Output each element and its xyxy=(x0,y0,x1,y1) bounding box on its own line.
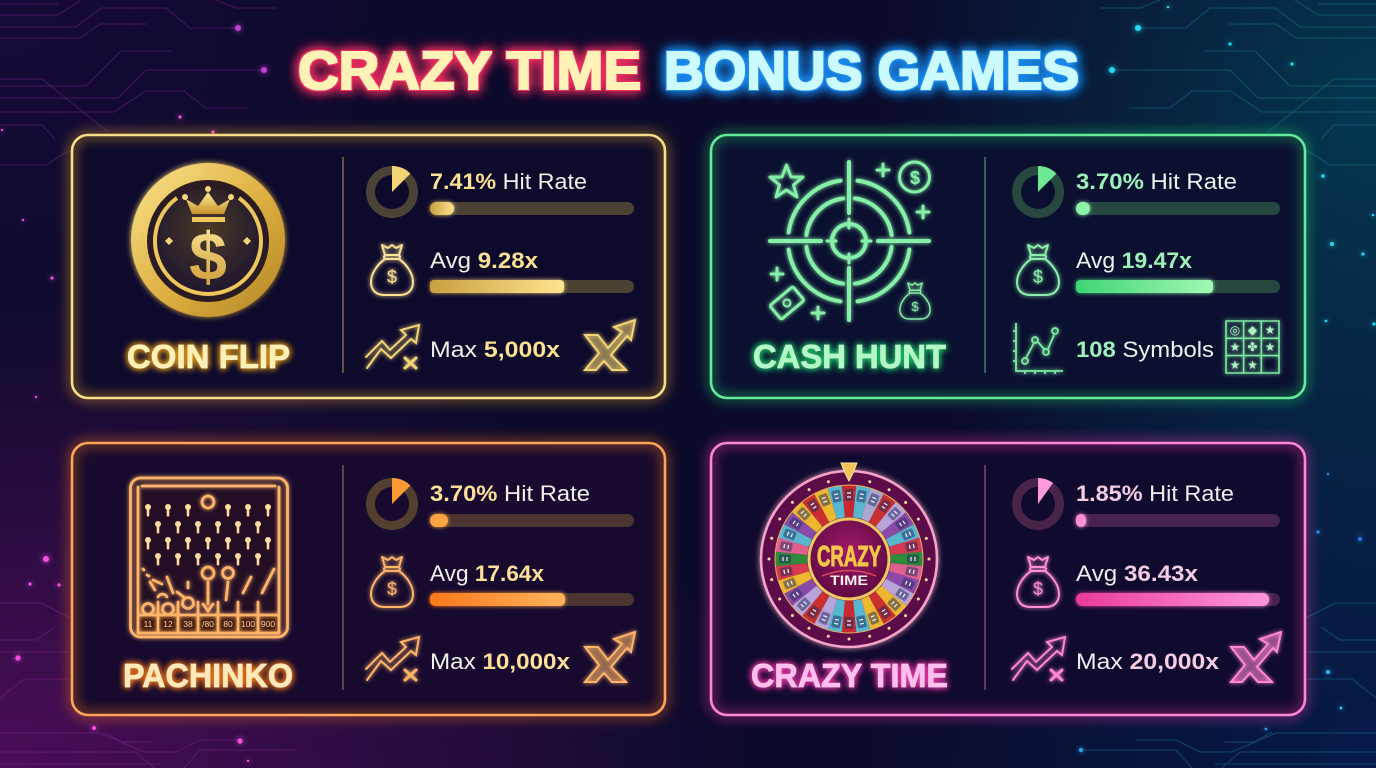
stat: hit rate: 3.70% Hit Rate xyxy=(430,481,590,506)
stat: max win xyxy=(366,320,635,370)
stat: hit rate: 3.70% Hit Rate xyxy=(1076,169,1237,194)
stat: hit rate xyxy=(370,478,634,527)
stat: hit rate: 1.85% Hit Rate xyxy=(1076,481,1234,506)
circuit lines: right xyxy=(1080,0,1376,768)
icon: gold coin xyxy=(131,163,285,317)
icon: pachinko board: 80 xyxy=(223,619,233,629)
icon: symbol grid: ◎ xyxy=(1230,323,1240,337)
icon: symbol grid xyxy=(1226,321,1279,373)
icon: pachinko board: 11 xyxy=(144,619,153,629)
icon: pachinko board xyxy=(130,478,288,637)
icon: pachinko board: 900 xyxy=(261,619,275,629)
icon: symbol grid: ★ xyxy=(1230,340,1240,354)
icon: prize wheel xyxy=(761,463,937,647)
title part: Crazy Time: CRAZY TIME xyxy=(298,41,641,101)
stat: max win: Max 5,000x xyxy=(430,337,561,362)
icon: target with money xyxy=(770,162,930,320)
stat: average multiplier: $ xyxy=(1033,579,1043,599)
stat: average multiplier: Avg 9.28x xyxy=(430,248,539,273)
heading: Coin Flip: COIN FLIP xyxy=(127,338,290,375)
stat: symbols xyxy=(1013,321,1279,374)
stat: max win: Max 20,000x xyxy=(1076,649,1220,674)
icon: small money bag xyxy=(900,168,930,319)
icon: pachinko board: 12 xyxy=(163,619,173,629)
stat: average multiplier xyxy=(371,557,634,607)
icon: symbol grid: ✤ xyxy=(1247,340,1258,354)
heading: Cash Hunt: CASH HUNT xyxy=(753,338,946,375)
icon: symbol grid: ★ xyxy=(1265,323,1275,337)
stat: max win: Max 10,000x xyxy=(430,649,571,674)
stat: average multiplier xyxy=(1017,557,1280,607)
stat: average multiplier xyxy=(371,245,634,295)
glowing dots: left xyxy=(1,25,267,762)
panel: Coin Flip xyxy=(72,135,665,398)
stat: average multiplier: Avg 19.47x xyxy=(1076,248,1193,273)
icon: small money bag: $ xyxy=(910,168,920,188)
icon: gold coin: $ xyxy=(189,219,227,295)
stat: hit rate xyxy=(1016,478,1280,527)
stat: hit rate: 7.41% Hit Rate xyxy=(430,169,587,194)
panel: Crazy Time xyxy=(711,443,1305,715)
stat: hit rate xyxy=(370,166,634,215)
icon: symbol grid: ★ xyxy=(1230,358,1240,372)
icon: symbol grid: ★ xyxy=(1265,340,1275,354)
icon: pachinko board: 100 xyxy=(241,619,255,629)
stat: average multiplier: $ xyxy=(387,579,397,599)
panel: Cash Hunt xyxy=(711,135,1305,398)
icon: symbol grid: ★ xyxy=(1247,358,1258,372)
panel: Pachinko xyxy=(72,443,665,715)
icon: prize wheel: CRAZY xyxy=(817,541,881,573)
circuit lines: left xyxy=(0,0,296,768)
stat: max win xyxy=(1012,632,1281,682)
title part: Bonus Games: BONUS GAMES xyxy=(664,41,1079,101)
heading: Crazy Time: CRAZY TIME xyxy=(751,657,948,694)
icon: line chart xyxy=(1013,323,1063,374)
stat: average multiplier: Avg 17.64x xyxy=(430,561,545,586)
icon: prize wheel: TIME xyxy=(830,572,868,588)
title xyxy=(298,41,1079,101)
stat: average multiplier: $ xyxy=(387,267,397,287)
stat: symbols: 108 Symbols xyxy=(1076,337,1214,362)
stat: average multiplier xyxy=(1017,245,1280,295)
glowing dots: right xyxy=(1079,6,1376,752)
heading: Pachinko: PACHINKO xyxy=(123,657,293,694)
stat: hit rate xyxy=(1016,166,1280,215)
stat: average multiplier: $ xyxy=(1033,267,1043,287)
stat: average multiplier: Avg 36.43x xyxy=(1076,561,1199,586)
icon: small money bag: $ xyxy=(911,299,919,314)
icon: symbol grid: ◆ xyxy=(1248,323,1258,337)
stat: max win xyxy=(366,632,635,682)
icon: pachinko board: 38 xyxy=(183,619,193,629)
icon: pachinko board: /80 xyxy=(202,619,214,629)
